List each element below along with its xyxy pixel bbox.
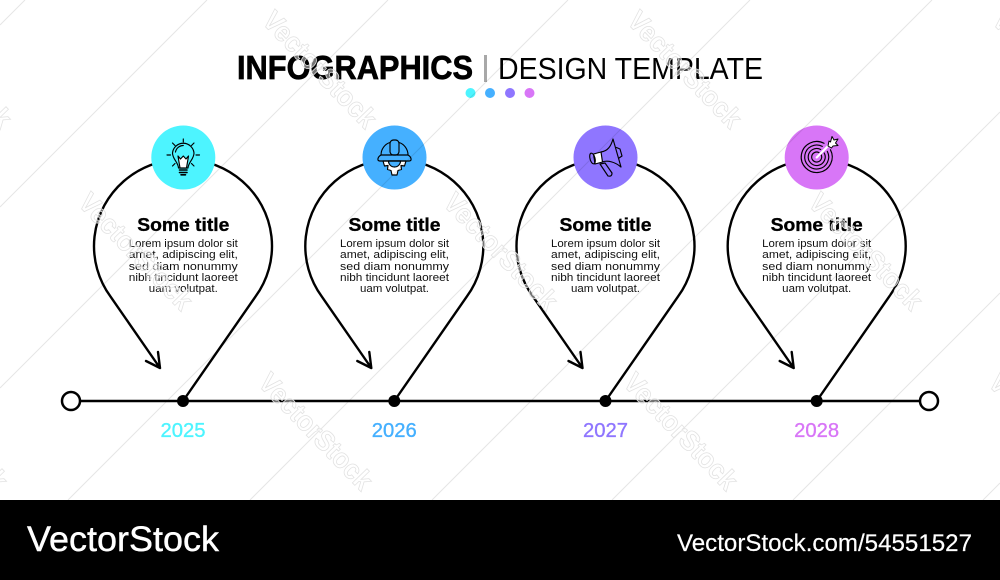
body text 2027: amet, adipiscing elit, bbox=[551, 249, 660, 261]
pin arrow outline 2025 bbox=[94, 159, 272, 401]
panel: 2028 bbox=[728, 126, 906, 442]
body text 2028: uam volutpat. bbox=[782, 283, 851, 295]
milestone dot 2028 bbox=[811, 395, 823, 407]
watermark overlay: VectorStock bbox=[438, 187, 564, 316]
body text 2027: nibh tincidunt laoreet bbox=[551, 272, 660, 284]
body text 2026: Lorem ipsum dolor sit bbox=[340, 238, 449, 250]
body text 2028: amet, adipiscing elit, bbox=[762, 249, 871, 261]
watermark overlay: VectorStock bbox=[622, 5, 748, 134]
icon circle 2028 bbox=[785, 126, 849, 190]
heading 2025: Some title bbox=[137, 214, 229, 235]
body text 2026 bbox=[340, 238, 450, 295]
milestone dot 2026 bbox=[388, 395, 400, 407]
year 2026: 2026 bbox=[372, 420, 417, 442]
footer url: VectorStock.com/54551527 bbox=[677, 530, 972, 557]
body text 2025: Lorem ipsum dolor sit bbox=[129, 238, 238, 250]
watermark overlay: VectorStock bbox=[73, 187, 199, 316]
body text 2027: sed diam nonummy bbox=[551, 261, 661, 273]
body text 2027: Lorem ipsum dolor sit bbox=[551, 238, 660, 250]
body text 2028: nibh tincidunt laoreet bbox=[762, 272, 871, 284]
title bbox=[237, 49, 763, 86]
panel: 2027 bbox=[516, 126, 694, 442]
watermark overlay: VectorStock bbox=[618, 367, 744, 496]
body text 2025: sed diam nonummy bbox=[129, 261, 238, 273]
body text 2028: Lorem ipsum dolor sit bbox=[762, 238, 871, 250]
icon: light bulb bbox=[167, 139, 200, 175]
year 2027: 2027 bbox=[583, 420, 628, 442]
body text 2028: sed diam nonummy bbox=[762, 261, 872, 273]
icon circle 2027 bbox=[574, 126, 638, 190]
heading 2027: Some title bbox=[560, 214, 652, 235]
body text 2026: amet, adipiscing elit, bbox=[340, 249, 449, 261]
title: DESIGN TEMPLATE bbox=[498, 51, 763, 86]
pin arrow outline 2026 bbox=[305, 159, 483, 401]
body text 2027 bbox=[551, 238, 661, 295]
icon: helmet with gear bbox=[378, 140, 411, 175]
icon: target with dart bbox=[801, 136, 838, 172]
icon circle 2026 bbox=[362, 126, 426, 190]
icon: megaphone bbox=[589, 139, 622, 176]
body text 2025 bbox=[129, 238, 238, 295]
icon circle 2025 bbox=[151, 126, 215, 190]
timeline bbox=[62, 392, 938, 410]
body text 2026: nibh tincidunt laoreet bbox=[340, 272, 449, 284]
footer band bbox=[0, 500, 1000, 580]
body text 2028 bbox=[762, 238, 872, 295]
pin arrow outline 2027 bbox=[516, 159, 694, 401]
heading 2026: Some title bbox=[348, 214, 440, 235]
title: INFOGRAPHICS bbox=[237, 49, 473, 86]
pin arrow outline 2028 bbox=[728, 159, 906, 401]
heading 2028: Some title bbox=[771, 214, 863, 235]
milestone dot 2025 bbox=[177, 395, 189, 407]
body text 2025: uam volutpat. bbox=[149, 283, 218, 295]
body text 2025: amet, adipiscing elit, bbox=[129, 249, 238, 261]
watermark overlay: VectorStock bbox=[253, 367, 379, 496]
body text 2025: nibh tincidunt laoreet bbox=[129, 272, 238, 284]
panel: 2026 bbox=[305, 126, 483, 442]
milestone dot 2027 bbox=[600, 395, 612, 407]
body text 2027: uam volutpat. bbox=[571, 283, 640, 295]
year 2028: 2028 bbox=[794, 420, 839, 442]
panel: 2025 bbox=[94, 126, 272, 442]
title accent dots bbox=[466, 88, 534, 98]
body text 2026: sed diam nonummy bbox=[340, 261, 450, 273]
body text 2026: uam volutpat. bbox=[360, 283, 429, 295]
year 2025: 2025 bbox=[160, 420, 206, 442]
watermark overlay: VectorStock bbox=[257, 5, 383, 134]
footer logo: VectorStock bbox=[27, 520, 220, 559]
watermark overlay: VectorStock bbox=[803, 187, 929, 316]
